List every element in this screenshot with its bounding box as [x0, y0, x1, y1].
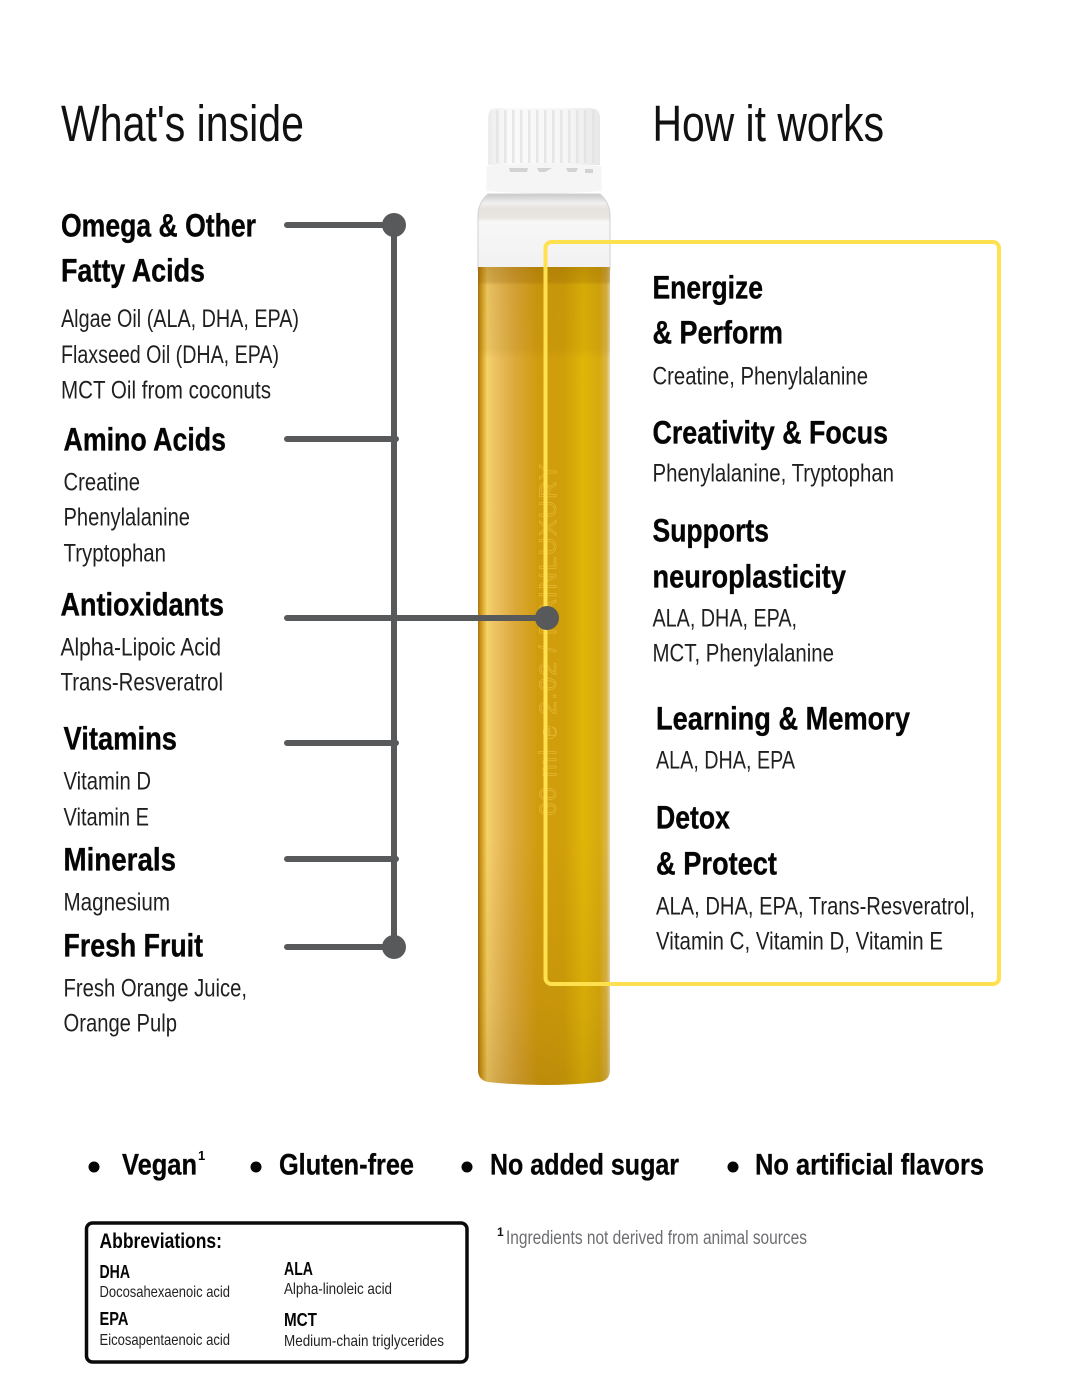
- abbreviations box: ALA: [284, 1259, 313, 1279]
- group: minerals: [64, 842, 176, 916]
- benefit: supports neuroplasticity: ALA, DHA, EPA,: [652, 604, 797, 632]
- benefit: energize and perform: [652, 270, 868, 390]
- benefit: creativity and focus: [652, 414, 894, 487]
- group: omega and fatty acids: Flaxseed Oil (DHA, EPA): [61, 341, 279, 369]
- benefit: energize and perform: Energize: [652, 270, 763, 306]
- benefit: detox and protect: Vitamin C, Vitamin D, Vitamin E: [656, 927, 943, 955]
- benefit: energize and perform: & Perform: [652, 314, 783, 350]
- abbreviations box: Abbreviations:: [100, 1230, 222, 1253]
- group: fresh fruit: Orange Pulp: [64, 1009, 177, 1037]
- claim: no artificial flavors: No artificial flavors: [755, 1148, 984, 1182]
- group: antioxidants: Trans-Resveratrol: [60, 668, 223, 696]
- claim: vegan: Vegan: [122, 1148, 197, 1182]
- collar notches: [509, 168, 593, 173]
- benefit: detox and protect: [656, 800, 975, 955]
- group: amino acids: [64, 422, 226, 567]
- abbreviations box: Medium-chain triglycerides: [284, 1333, 444, 1350]
- group: amino acids: Creatine: [64, 468, 140, 496]
- cap ribs: [490, 110, 598, 163]
- claim: vegan: [88, 1148, 205, 1182]
- group: omega and fatty acids: Algae Oil (ALA, DHA, EPA): [61, 305, 299, 333]
- benefit: learning and memory: [656, 700, 910, 774]
- liquid shading: [478, 267, 610, 1085]
- abbreviations box: [86, 1223, 467, 1362]
- bottle cap: [488, 108, 600, 165]
- panel: what's inside ingredients: [60, 208, 299, 1037]
- benefit: detox and protect: & Protect: [656, 846, 777, 882]
- benefit: supports neuroplasticity: MCT, Phenylalanine: [652, 639, 834, 667]
- group: fresh fruit: [64, 928, 247, 1037]
- footnote: 1: [497, 1225, 504, 1239]
- group: fresh fruit: Fresh Fruit: [64, 928, 203, 964]
- bottle engraving: 60 ml ℮ 2.02 / RAINLUXURY: [535, 464, 562, 816]
- group: amino acids: Phenylalanine: [64, 503, 190, 531]
- abbreviations box: EPA: [100, 1309, 128, 1329]
- group: omega and fatty acids: Omega & Other: [61, 208, 256, 244]
- yellow panel outline: [546, 242, 999, 984]
- benefit: creativity and focus: Creativity & Focus: [652, 414, 888, 450]
- abbreviations box: Eicosapentaenoic acid: [100, 1332, 230, 1349]
- benefit: learning and memory: Learning & Memory: [656, 700, 910, 736]
- panel: how it works benefits: [652, 270, 975, 955]
- benefit: supports neuroplasticity: Supports: [652, 512, 769, 548]
- group: antioxidants: Alpha-Lipoic Acid: [60, 633, 221, 661]
- heading: How it works: How it works: [652, 95, 884, 152]
- group: omega and fatty acids: MCT Oil from coconuts: [61, 376, 271, 404]
- abbreviations box: DHA: [100, 1262, 130, 1282]
- benefit: detox and protect: ALA, DHA, EPA, Trans-Resveratrol,: [656, 892, 975, 920]
- group: minerals: Minerals: [64, 842, 176, 878]
- group: antioxidants: [60, 586, 224, 696]
- group: amino acids: Amino Acids: [64, 422, 226, 458]
- claim: no added sugar: No added sugar: [490, 1148, 679, 1182]
- group: minerals: Magnesium: [64, 888, 170, 916]
- group: vitamins: [64, 720, 177, 831]
- bottle liquid: [478, 267, 610, 1085]
- benefit: detox and protect: Detox: [656, 800, 730, 836]
- benefit: creativity and focus: Phenylalanine, Tryptophan: [652, 459, 894, 487]
- product bottle: [478, 108, 610, 1085]
- group: omega and fatty acids: [61, 208, 299, 404]
- claim: vegan: 1: [198, 1148, 205, 1163]
- group: omega and fatty acids: Fatty Acids: [61, 252, 205, 288]
- group: vitamins: Vitamin E: [64, 803, 149, 831]
- benefit: supports neuroplasticity: [652, 512, 846, 667]
- group: vitamins: Vitamins: [64, 720, 177, 756]
- bottle glass shoulder: [478, 194, 610, 270]
- group: fresh fruit: Fresh Orange Juice,: [64, 974, 247, 1002]
- abbreviations box: MCT: [284, 1310, 317, 1330]
- dietary claims row: [88, 1148, 984, 1182]
- benefit: supports neuroplasticity: neuroplasticity: [652, 558, 846, 594]
- cap collar: [486, 164, 602, 194]
- footnote: Ingredients not derived from animal sources: [506, 1228, 807, 1249]
- group: vitamins: Vitamin D: [64, 767, 151, 795]
- connector lines: [287, 213, 559, 959]
- abbreviations box: Alpha-linoleic acid: [284, 1281, 392, 1298]
- group: amino acids: Tryptophan: [64, 539, 166, 567]
- heading: What's inside: What's inside: [61, 95, 304, 152]
- benefit: learning and memory: ALA, DHA, EPA: [656, 746, 795, 774]
- benefit: energize and perform: Creatine, Phenylalanine: [652, 362, 868, 390]
- abbreviations box: Docosahexaenoic acid: [100, 1284, 230, 1301]
- claim: gluten-free: Gluten-free: [279, 1148, 414, 1182]
- group: antioxidants: Antioxidants: [60, 586, 224, 622]
